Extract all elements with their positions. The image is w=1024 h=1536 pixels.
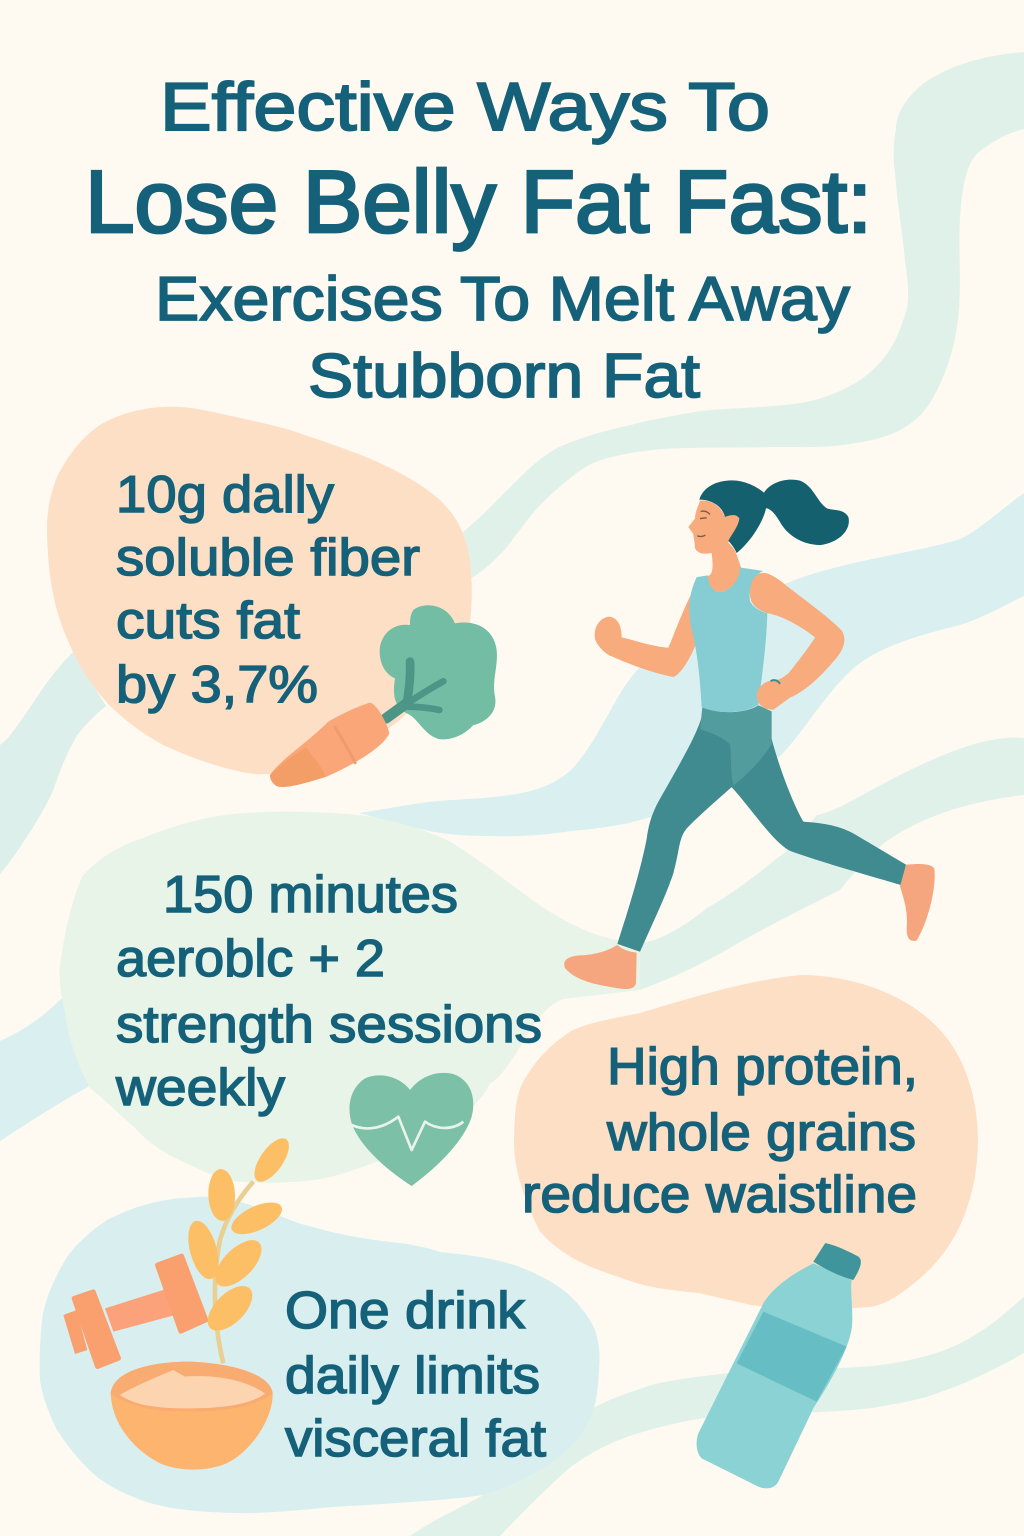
- text: drink stat: daily limits: [285, 1347, 540, 1405]
- text: protein stat: reduce waistline: [522, 1166, 917, 1224]
- title: [85, 69, 872, 411]
- background wave: left mint band: [0, 652, 106, 874]
- text: protein stat: [522, 1038, 918, 1224]
- text: exercise stat: 150 minutes: [163, 866, 458, 924]
- text: fiber stat: by 3,7%: [116, 656, 318, 714]
- figure: runner: [564, 480, 935, 989]
- runner: hair and ponytail: [699, 480, 849, 553]
- title: Effective Ways To: [160, 69, 770, 145]
- background wave: lower left blue band: [0, 999, 200, 1141]
- panel: one drink: [40, 1197, 600, 1513]
- text: drink stat: [285, 1282, 547, 1468]
- background wave: bottom right band: [410, 1297, 1024, 1536]
- runner: bent arm: [750, 573, 844, 710]
- text: protein stat: whole grains: [606, 1104, 916, 1162]
- text: exercise stat: aeroblc + 2: [116, 930, 385, 988]
- runner: tank top: [689, 567, 767, 712]
- text: protein stat: High protein,: [607, 1038, 918, 1096]
- panel: protein and grains: [514, 975, 978, 1309]
- runner: front shoe: [564, 945, 637, 989]
- text: fiber stat: [116, 466, 420, 714]
- runner: facial features: [697, 511, 710, 537]
- icon: water bottle: [697, 1243, 861, 1488]
- runner: head and neck: [688, 501, 742, 592]
- bowl: [111, 1362, 273, 1470]
- text: drink stat: visceral fat: [285, 1410, 547, 1468]
- wheat stalk: [183, 1133, 295, 1363]
- dumbbell: [63, 1256, 206, 1367]
- runner: hips: [700, 705, 772, 785]
- background wave: lower mint band: [600, 738, 1024, 990]
- text: exercise stat: strength sessions: [116, 996, 542, 1054]
- icon: carrot: [270, 605, 497, 787]
- text: exercise stat: weekly: [115, 1059, 285, 1117]
- icon: dumbbell, wheat and bowl: [63, 1133, 295, 1470]
- background wave: blue band: [359, 493, 1024, 836]
- text: drink stat: One drink: [285, 1282, 526, 1340]
- runner: front leg: [732, 736, 906, 885]
- runner: back leg: [617, 715, 753, 952]
- panel: exercise: [60, 812, 640, 1183]
- title: Lose Belly Fat Fast:: [85, 152, 872, 251]
- icon: heart with pulse: [349, 1073, 473, 1186]
- runner: back shoe: [900, 864, 935, 941]
- runner: watch: [771, 680, 780, 684]
- title: Exercises To Melt Away: [155, 265, 850, 334]
- text: exercise stat: [115, 866, 542, 1117]
- title: Stubborn Fat: [308, 342, 700, 411]
- background wave: upper mint band: [462, 52, 1024, 579]
- text: fiber stat: 10g dally: [116, 466, 334, 524]
- text: fiber stat: soluble fiber: [116, 529, 420, 587]
- runner: forward arm: [595, 589, 700, 677]
- panel: soluble fiber: [47, 407, 472, 774]
- text: fiber stat: cuts fat: [116, 592, 301, 650]
